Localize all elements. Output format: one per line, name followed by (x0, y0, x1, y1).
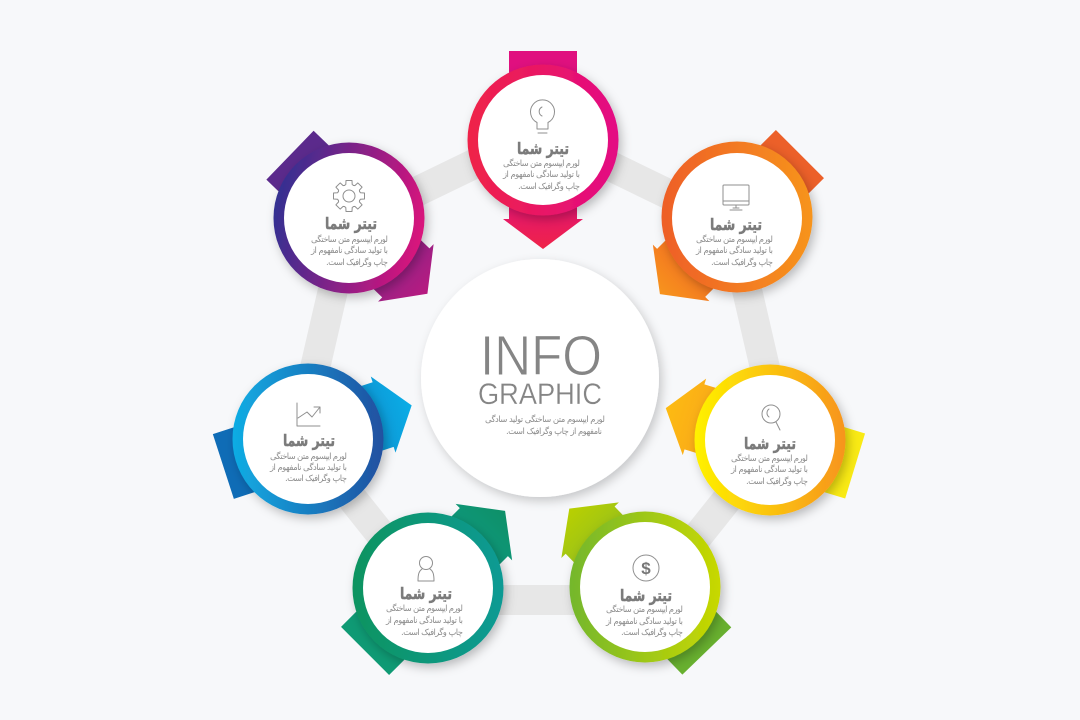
icon: gear (334, 180, 364, 212)
ring (662, 142, 812, 292)
icon: monitor (723, 185, 749, 210)
arrow: purple (259, 129, 455, 322)
icon: dollar (633, 555, 659, 581)
step 6 body: با تولید سادگی نامفهوم از (269, 462, 347, 473)
arrow: yellow (654, 370, 867, 504)
panel: step 7 purple (259, 129, 455, 322)
central body text: لورم ایپسوم متن ساختگی تولید سادگی (485, 414, 605, 425)
ring (468, 64, 618, 216)
panel: step 2 orange (632, 126, 828, 322)
arrow: teal (337, 483, 533, 679)
ring (274, 142, 424, 294)
step 2 body: چاپ وگرافیک است. (711, 257, 773, 268)
step 4 title: تیتر شما (620, 586, 672, 605)
step 6 body: چاپ وگرافیک است. (285, 473, 347, 484)
central body text (485, 414, 605, 437)
step 6 body: لورم ایپسوم متن ساختگی (270, 451, 347, 462)
step 4 body: لورم ایپسوم متن ساختگی (606, 604, 683, 615)
step 6 body (269, 451, 347, 484)
step 7 body: با تولید سادگی نامفهوم از (310, 245, 388, 256)
step 7 body (310, 234, 388, 268)
white disc (580, 522, 710, 652)
heptagon connector band (300, 132, 780, 600)
step 7 body: چاپ وگرافیک است. (326, 257, 388, 268)
step 7 body: لورم ایپسوم متن ساختگی (311, 234, 388, 245)
step 1 body: چاپ وگرافیک است. (518, 181, 580, 192)
step 5 body: لورم ایپسوم متن ساختگی (386, 603, 463, 614)
step 2 title: تیتر شما (710, 215, 762, 234)
central body text: نامفهوم از چاپ وگرافیک است. (506, 426, 602, 437)
step 5 body (385, 603, 463, 638)
step 5 body: با تولید سادگی نامفهوم از (385, 615, 463, 626)
white disc (363, 523, 493, 653)
step 6 title: تیتر شما (283, 431, 335, 450)
icon: dollar: $ (641, 559, 651, 578)
icon: line chart (297, 403, 320, 426)
ring (232, 364, 384, 514)
arrow: blue (211, 367, 424, 505)
panel: step 4 lime (541, 481, 736, 679)
step 5 title: تیتر شما (400, 584, 452, 603)
step 1 body: با تولید سادگی نامفهوم از (502, 169, 580, 180)
icon: person (418, 556, 434, 581)
arrow: orange (632, 126, 828, 322)
step 5 body: چاپ وگرافیک است. (401, 627, 463, 638)
heading: GRAPHIC: GRAPHIC (478, 378, 602, 411)
step 3 title: تیتر شما (744, 434, 796, 453)
step 1 title: تیتر شما (517, 139, 569, 158)
step 3 body: چاپ وگرافیک است. (746, 476, 808, 487)
white disc (705, 375, 835, 505)
panel: step 5 teal (337, 483, 533, 679)
icon: magnifier (762, 405, 780, 430)
step 2 body: با تولید سادگی نامفهوم از (695, 245, 773, 256)
step 4 body (605, 604, 683, 638)
heading: INFO: INFO (480, 324, 602, 388)
step 4 body: با تولید سادگی نامفهوم از (605, 616, 683, 627)
step 7 title: تیتر شما (325, 214, 377, 233)
step 3 body (730, 453, 808, 487)
step 2 body (695, 234, 773, 268)
panel: step 6 blue (211, 364, 424, 514)
arrow: red down (503, 51, 583, 249)
white disc (243, 374, 373, 504)
step 1 body: لورم ایپسوم متن ساختگی (503, 158, 580, 169)
ring (694, 364, 846, 516)
central circle panel (421, 259, 659, 497)
white disc (478, 75, 608, 205)
step 1 body (502, 158, 580, 192)
step 3 body: لورم ایپسوم متن ساختگی (731, 453, 808, 464)
panel: step 3 yellow (654, 364, 867, 516)
white disc (284, 153, 414, 283)
step 2 body: لورم ایپسوم متن ساختگی (696, 234, 773, 245)
step 3 body: با تولید سادگی نامفهوم از (730, 464, 808, 475)
step 4 body: چاپ وگرافیک است. (621, 627, 683, 638)
arrow: lime (541, 481, 736, 679)
white disc (672, 153, 802, 283)
panel: step 1 red (468, 51, 618, 249)
icon: light bulb (530, 100, 554, 133)
ring (352, 512, 504, 664)
ring (570, 512, 720, 662)
